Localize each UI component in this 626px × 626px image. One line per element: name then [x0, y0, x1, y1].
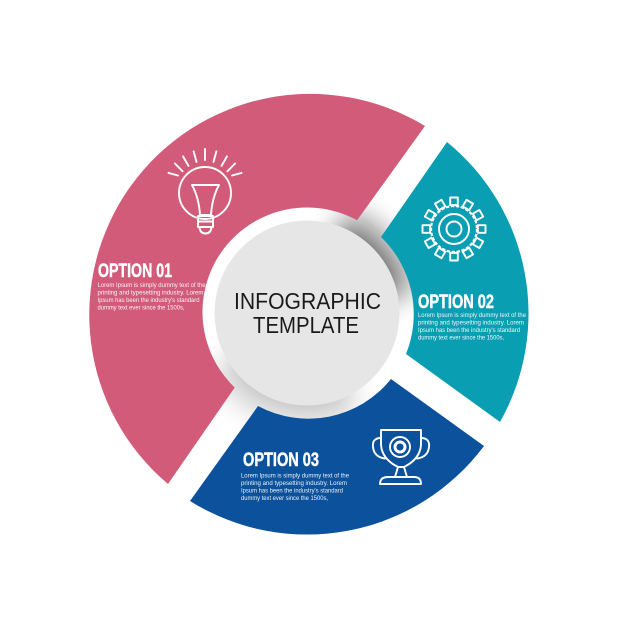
panel: option 01: [89, 94, 425, 484]
centre circle: [202, 208, 406, 406]
text block: option 03: [241, 472, 349, 502]
teal segment: [381, 142, 529, 422]
text block: option 01: [98, 282, 206, 312]
heading: option 03: OPTION 03: [243, 449, 319, 471]
heading: option 01: OPTION 01: [98, 260, 172, 282]
pink segment: [89, 94, 425, 484]
title: INFOGRAPHIC: [234, 288, 381, 314]
text block: option 02: Ipsum has been the industry's standard: [418, 327, 520, 334]
icon: trophy: [373, 430, 429, 484]
text block: option 03: Lorem Ipsum is simply dummy text of the: [241, 472, 349, 480]
text block: option 02: printing and typesetting industry. Lorem: [418, 320, 524, 326]
text block: option 01: dummy text ever since the 1500s,: [98, 304, 185, 312]
text block: option 03: dummy text ever since the 1500s,: [241, 495, 328, 502]
soft shadow behind centre circle: [224, 202, 414, 420]
panel: option 02: [381, 142, 529, 422]
title: TEMPLATE: [253, 312, 359, 338]
title: [234, 288, 381, 338]
icon: gear: [422, 198, 486, 260]
text block: option 02: Lorem Ipsum is simply dummy text of the: [418, 312, 526, 319]
text block: option 01: printing and typesetting industry. Lorem: [98, 290, 204, 296]
text block: option 03: printing and typesetting industry. Lorem: [241, 480, 347, 487]
blue segment: [190, 379, 484, 535]
text block: option 03: Ipsum has been the industry's standard: [241, 488, 343, 494]
text block: option 02: [418, 312, 526, 342]
heading: option 02: OPTION 02: [418, 291, 494, 313]
text block: option 02: dummy text ever since the 1500s,: [418, 334, 504, 342]
icon: light bulb: [168, 149, 242, 234]
outer ring: [202, 208, 412, 416]
ring shading: [214, 210, 412, 416]
text block: option 01: Ipsum has been the industry's standard: [98, 297, 200, 304]
inner disc: [214, 220, 400, 406]
panel: option 03: [190, 379, 484, 535]
text block: option 01: Lorem Ipsum is simply dummy text of the: [98, 282, 206, 289]
